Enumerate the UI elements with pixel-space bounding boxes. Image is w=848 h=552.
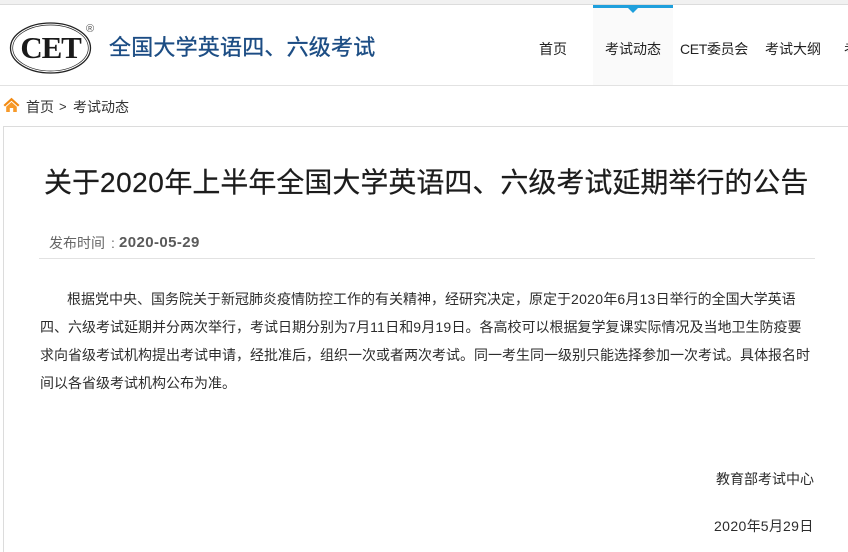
issuing organisation: 教育部考试中心 bbox=[716, 471, 814, 487]
navigation menu: 考试大纲 bbox=[765, 41, 821, 57]
text: 2020-05-29 bbox=[119, 234, 200, 251]
text: 考试动态 bbox=[73, 99, 129, 115]
announcement body: 四、六级考试延期并分两次举行，考试日期分别为7月11日和9月19日。各高校可以根据复学复课实际情况及当地卫生防疫要 bbox=[40, 319, 802, 335]
announcement body: 根据党中央、国务院关于新冠肺炎疫情防控工作的有关精神，经研究决定，原定于2020年6月13日举行的全国大学英语 bbox=[67, 291, 796, 307]
announcement body bbox=[40, 291, 810, 391]
breadcrumb bbox=[26, 99, 129, 115]
navigation menu bbox=[539, 41, 848, 57]
top grey band bbox=[0, 0, 848, 5]
navigation menu: 首页 bbox=[539, 41, 567, 57]
signature date: 2020年5月29日 bbox=[714, 518, 813, 534]
header divider bbox=[0, 85, 848, 86]
announcement body: 求向省级考试机构提出考试申请，经批准后，组织一次或者两次考试。同一考生同一级别只能选择参加一次考试。具体报名时 bbox=[40, 347, 810, 363]
announcement body: 间以各省级考试机构公布为准。 bbox=[40, 375, 236, 391]
breadcrumb: 首页 bbox=[26, 99, 54, 115]
publish date bbox=[49, 234, 200, 251]
icon: CET logo bbox=[10, 22, 94, 74]
text: > bbox=[59, 99, 67, 114]
navigation menu: CET委员会 bbox=[680, 41, 748, 57]
text: : bbox=[111, 235, 115, 251]
navigation menu: 考试动态 bbox=[605, 41, 661, 57]
icon: home bbox=[4, 98, 20, 112]
site title: 全国大学英语四、六级考试 bbox=[109, 35, 375, 60]
active navigation tab bbox=[593, 5, 673, 85]
publish date: 发布时间 bbox=[49, 235, 105, 251]
icon: CET logo: ® bbox=[86, 23, 94, 35]
panel: article card bbox=[3, 126, 848, 552]
article heading: 关于2020年上半年全国大学英语四、六级考试延期举行的公告 bbox=[44, 167, 808, 198]
meta divider bbox=[39, 258, 815, 259]
icon: CET logo: CET bbox=[20, 30, 82, 65]
